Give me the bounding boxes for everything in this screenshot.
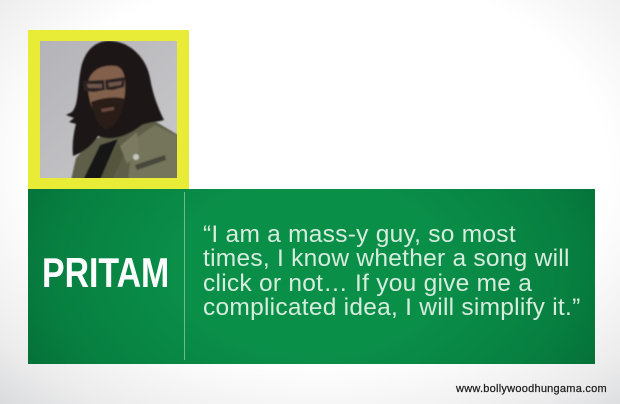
quote text: complicated idea, I will simplify it.” (203, 294, 580, 321)
quote text: click or not… If you give me a (203, 270, 532, 297)
quote panel (28, 189, 595, 364)
portrait photo (40, 41, 177, 178)
quote text (203, 221, 580, 321)
vertical divider (184, 192, 185, 360)
website credit: www.bollywoodhungama.com (456, 383, 607, 395)
name heading: PRITAM (42, 249, 169, 296)
portrait frame (28, 30, 189, 190)
quote text: “I am a mass-y guy, so most (203, 221, 516, 248)
quote text: times, I know whether a song will (203, 245, 570, 272)
